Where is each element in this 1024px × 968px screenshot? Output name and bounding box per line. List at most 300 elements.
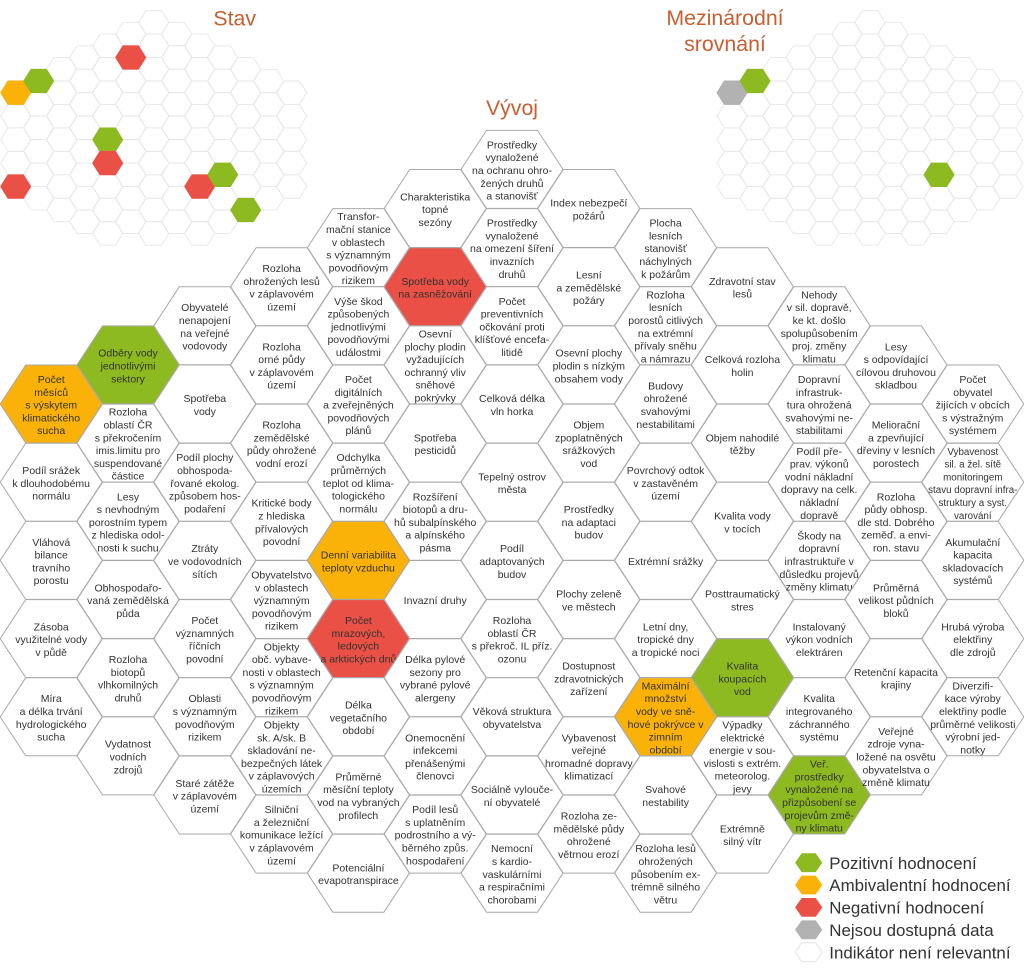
legend item: Negativní hodnocení: Negativní hodnocení bbox=[829, 898, 985, 918]
hex: Počet preventivních očkování: litidě bbox=[501, 347, 523, 359]
hex: Počet mrazových, ledových a arktických dnů: ledových bbox=[338, 641, 379, 653]
hex: Vláhová bilance travního porostu: travního bbox=[32, 562, 70, 574]
hex: Spotřeba vody na zasněžování bbox=[384, 248, 486, 326]
hex: Výše škod bbox=[307, 287, 409, 365]
hex: Odchylka průměrných teplot: normálu bbox=[339, 503, 378, 515]
hex: Transformační stanice: s významným bbox=[326, 250, 391, 262]
hex: Škody na dopravní infrastruktuře: Škody na bbox=[797, 529, 841, 542]
hex: Obyvatelé nenapojení na veřejné vodovody: Obyvatelé bbox=[181, 302, 229, 314]
hex: Objem zpoplatněných srážkových vod bbox=[538, 404, 640, 482]
hex: Rozloha ohrožených lesů v záplavovém území: v záplavovém bbox=[249, 289, 314, 301]
hex: Rozloha orné půdy v záplavovém území: Rozloha bbox=[262, 341, 301, 353]
hex: Výpadky elektrické energie: Výpadky bbox=[722, 720, 763, 732]
legend item: Pozitivní hodnocení: Pozitivní hodnocení bbox=[829, 854, 977, 873]
hex: Vláhová bilance travního porostu: Vláhová bbox=[32, 537, 70, 549]
hex: Lesy s nevhodným porostním typem bbox=[77, 482, 179, 560]
hex: Kritické body z hlediska přívalových povodní: přívalových bbox=[255, 523, 308, 535]
hex: Letní dny, tropické dny a tropické noci: a tropické noci bbox=[632, 647, 699, 659]
hex: Rozloha biotopů vlhkomilných druhů: druhů bbox=[115, 693, 142, 705]
hex: Rozloha zemědělské půdy ohrožené větrnou erozí: větrnou erozí bbox=[558, 849, 620, 861]
hex: Odběry vody jednotlivými sektory bbox=[77, 326, 179, 404]
hex: Počet digitálních plánů: digitálních bbox=[335, 387, 382, 399]
hex: Plocha lesních stanovišť náchylných k požárům: lesních bbox=[649, 230, 682, 242]
hex: Lesy s nevhodným porostním typem: s nevhodným bbox=[97, 504, 159, 516]
hex: Lesy s odpovídající cílovou druhovou skladbou: skladbou bbox=[875, 380, 917, 392]
hex: Rozloha oblastí ČR s překroč. IL příz. ozonu: oblastí ČR bbox=[487, 627, 537, 640]
hex: Průměrné měsíční teploty vod: profilech bbox=[339, 810, 378, 822]
hex: Zásoba využitelné vody v půdě: využitelné vody bbox=[15, 634, 88, 646]
hex: Rozloha zemědělské půdy ohrožené větrnou erozí: mědělské půdy bbox=[553, 823, 625, 835]
hex: Podíl plochy obhospodařované ekolog. způsobem: obhospoda- bbox=[177, 465, 233, 477]
hex: Letní dny, tropické dny a tropické noci: Letní dny, bbox=[643, 621, 688, 633]
hex: Charakteristika topné sezóny: sezóny bbox=[419, 217, 453, 229]
hex: Výpadky elektrické energie bbox=[691, 717, 793, 796]
hex: Prostředky na adaptaci budov: budov bbox=[574, 530, 604, 542]
hex: Tepelný ostrov města bbox=[461, 443, 563, 521]
hex: Budovy ohrožené svahovými nestabilitami: svahovými bbox=[641, 406, 690, 418]
hex: Oblasti s významným povodňovým rizikem: s významným bbox=[173, 706, 237, 718]
hex: Nemocní s kardiovaskulárními a respiračními chorobami: vaskulárními bbox=[483, 869, 541, 881]
hex: Veř. prostředky na přizpůsobení: projevům změ- bbox=[784, 810, 854, 822]
hex: Počet preventivních očkování: Počet bbox=[499, 296, 526, 308]
hex: Instalovaný výkon vodních elektráren: elektráren bbox=[796, 647, 843, 659]
hex: Nehody v sil. dopravě: klimatu bbox=[803, 353, 836, 365]
hex: Oblasti s významným povodňovým rizikem: rizikem bbox=[188, 732, 222, 744]
hex: Obyvatelé nenapojení na veřejné vodovody: na veřejné bbox=[180, 328, 229, 340]
hex: Míra a délka trvání hydrologického sucha: hydrologického bbox=[16, 719, 87, 731]
hex: Rozloha lesních porostů citlivých bbox=[615, 287, 717, 365]
hex: Instalovaný výkon vodních elektráren: výkon vodních bbox=[786, 634, 853, 646]
hex: Extrémně silný vítr: silný vítr bbox=[723, 836, 762, 848]
hex: Rozloha půdy obhosp. dle std. Dobrého: Rozloha bbox=[877, 491, 915, 503]
hex: Kvalita vody v tocích: v tocích bbox=[724, 523, 761, 535]
hex: Dopravní infrastruktura ohrožená svahovými nestabilitami: tura ohrožená bbox=[787, 400, 852, 412]
hex: Staré zátěže v záplavovém území: území bbox=[191, 803, 219, 815]
hex: Počet digitálních plánů: povodňových bbox=[327, 412, 389, 424]
hex: Rozloha orné půdy v záplavovém území: území bbox=[267, 380, 296, 392]
hex: Obyvatelstvo v oblastech významným povodňovým rizikem: povodňovým bbox=[252, 608, 312, 620]
legend bbox=[795, 853, 1011, 962]
hex: Nehody v sil. dopravě bbox=[768, 287, 870, 365]
hex: Vybavenost sil. a žel. sítě monitoringem: stavu dopravní infra- bbox=[928, 485, 1017, 496]
hex: Prostředky na omezení šíření invazních druhů: druhů bbox=[499, 269, 526, 281]
hex: Objekty sk. A/sk. B skladování nebezpečných látek: sk. A/sk. B bbox=[257, 732, 306, 744]
hex: Rozšíření biotopů a druhů: hů subalpínského bbox=[394, 517, 477, 529]
hex: Silniční a železniční komunikace: Silniční bbox=[265, 804, 299, 816]
hex: Extrémní srážky: Extrémní srážky bbox=[628, 556, 704, 568]
hex: Rozloha lesů ohrožených působením větru: ohrožených bbox=[638, 856, 693, 868]
hex: Objem zpoplatněných srážkových vod: zpoplatněných bbox=[555, 432, 623, 444]
hex: Průměrné měsíční teploty vod: měsíční teploty bbox=[323, 784, 394, 796]
hex: Osevní plochy plodin s nízkým obsahem vody bbox=[538, 326, 640, 404]
hex: Rozloha půdy obhosp. dle std. Dobrého: zeměď. a envi- bbox=[861, 530, 931, 542]
hex: Rozloha lesních porostů citlivých: přívaly sněhu bbox=[634, 341, 697, 353]
hex: Zásoba využitelné vody v půdě bbox=[0, 600, 102, 678]
hex: Rozloha biotopů vlhkomilných druhů: biotopů bbox=[111, 667, 145, 679]
hex: Silniční a železniční komunikace: a železniční bbox=[254, 817, 309, 829]
hex: Celková rozloha holin: holin bbox=[731, 367, 754, 379]
hex: Retenční kapacita krajiny: krajiny bbox=[881, 680, 912, 692]
hex: Dopravní infrastruktura ohrožená svahovými nestabilitami: infrastruk- bbox=[796, 387, 843, 399]
hex: Odchylka průměrných teplot: Odchylka bbox=[337, 452, 380, 464]
hex: Silniční a železniční komunikace: komunikace ležící bbox=[240, 830, 323, 842]
hex: Podíl srážek k dlouhodobému normálu: Podíl srážek bbox=[22, 465, 81, 477]
hex: srovnání green upper left bbox=[740, 69, 770, 93]
hex: Délka pylové sezony: Délka pylové bbox=[405, 654, 465, 666]
hex: Sociálně vyloučení obyvatelé: Sociálně vylouče- bbox=[471, 784, 554, 796]
hex: Stav red right bbox=[185, 175, 215, 198]
hex: Denní variabilita teploty vzduchu: Denní variabilita bbox=[321, 550, 396, 562]
hex: Potenciální evapotranspirace bbox=[307, 834, 409, 912]
hex: Svahové nestability: Svahové bbox=[645, 784, 686, 796]
hex: Podíl plochy obhospodařované ekolog. způsobem: podaření bbox=[184, 503, 226, 515]
hex: Spotřeba pesticidů: Spotřeba bbox=[414, 432, 457, 444]
hex: Akumulační kapacita skladovacích systémů: skladovacích bbox=[942, 562, 1003, 574]
hex: Podíl adaptovaných budov: adaptovaných bbox=[479, 556, 545, 568]
hex: Maximální množství vody ve sněhové pokrývce bbox=[615, 678, 717, 756]
hex: Stav green bottom right bbox=[231, 198, 261, 222]
hex: Ztráty ve vodovodních sítích: ve vodovodních bbox=[168, 556, 242, 568]
hex: Veř. prostředky na přizpůsobení: ny klimatu bbox=[796, 823, 843, 835]
hex: Stav red centre bbox=[93, 151, 123, 175]
hex: Plocha lesních stanovišť náchylných k požárům: náchylných bbox=[639, 256, 692, 268]
hex: Celková délka vln horka: vln horka bbox=[491, 406, 533, 418]
hex: Průměrné měsíční teploty vod bbox=[307, 756, 409, 834]
hex: Počet preventivních očkování: preventivních bbox=[481, 309, 543, 321]
hex: Vybavenost sil. a žel. sítě monitoringem: struktury a syst. bbox=[939, 498, 1007, 509]
hex: Extrémně silný vítr bbox=[691, 795, 793, 873]
hex: Rozloha zemědělské půdy ohrožené vodní erozí bbox=[231, 404, 333, 482]
hex: Rozloha ohrožených lesů v záplavovém území: ohrožených lesů bbox=[243, 276, 320, 288]
hex: Potenciální evapotranspirace: evapotranspirace bbox=[318, 875, 399, 887]
hex: Hrubá výroba elektřiny dle zdrojů: elektřiny bbox=[953, 634, 993, 646]
hex: Obyvatelstvo v oblastech významným povodňovým rizikem: Obyvatelstvo bbox=[251, 570, 312, 582]
hex: Meliorační a zpevňující dřeviny bbox=[845, 404, 947, 482]
hex: Posttraumatický stres: stres bbox=[731, 602, 754, 614]
hex: Budovy ohrožené svahovými nestabilitami: Budovy bbox=[648, 380, 684, 392]
hex: Veř. prostředky na přizpůsobení bbox=[768, 756, 870, 835]
hex: Vláhová bilance travního porostu bbox=[0, 521, 102, 599]
hex: Denní variabilita teploty vzduchu: teploty vzduchu bbox=[322, 562, 395, 574]
hex: Výše škod: událostmi bbox=[336, 347, 381, 359]
hex: Podíl lesů s uplatněním podrostního hospodaření: s uplatněním bbox=[405, 817, 466, 829]
hex: Diverzifikace výroby elektřiny: výrobní jed- bbox=[945, 732, 1001, 744]
hex: Staré zátěže v záplavovém území: Staré zátěže bbox=[175, 778, 234, 790]
hex: Denní variabilita teploty vzduchu bbox=[307, 521, 409, 599]
hex: Odběry vody jednotlivými sektory: jednotlivými bbox=[100, 360, 155, 372]
hex: Obyvatelé nenapojení na veřejné vodovody: vodovody bbox=[182, 341, 228, 353]
hex: Objem zpoplatněných srážkových vod: vod bbox=[580, 458, 597, 470]
hex: Rozloha půdy obhosp. dle std. Dobrého bbox=[845, 482, 947, 560]
hex: Vybavenost sil. a žel. sítě monitoringem: sil. a žel. sítě bbox=[944, 460, 1002, 471]
hex: Onemocnění infekcemi přenášenými členovci: Onemocnění bbox=[405, 732, 465, 744]
hex: Podíl přeprav. výkonů vodní nákladní dopravy bbox=[768, 443, 870, 522]
hex: Invazní druhy: Invazní druhy bbox=[404, 595, 467, 607]
hex: Prostředky na adaptaci budov bbox=[538, 482, 640, 560]
hex: Objekty obč. vybavenosti v oblastech: obč. vybave- bbox=[252, 654, 312, 666]
hex: Počet obyvatel žijících v obcích s výstražným systémem: Počet bbox=[959, 374, 986, 386]
hex: Vybavenost veřejné hromadné dopravy klimatizací: hromadné dopravy bbox=[545, 758, 633, 770]
hex: Nemocní s kardiovaskulárními a respiračními chorobami: chorobami bbox=[487, 894, 537, 906]
hex: Rozloha lesních porostů citlivých: porostů citlivých bbox=[628, 315, 703, 327]
hex: Rozloha lesů ohrožených působením větru: působením ex- bbox=[631, 869, 701, 881]
panel: Stav mini hexagon grid bbox=[1, 11, 307, 245]
hex: Počet měsíců s výskytem klimatického sucha: Počet bbox=[38, 374, 65, 386]
hex: Silniční a železniční komunikace bbox=[231, 795, 333, 873]
hex: Nehody v sil. dopravě: Nehody bbox=[801, 289, 838, 301]
heading: Mezinárodní srovnání: Mezinárodní bbox=[666, 6, 784, 30]
hex: srovnání grey bbox=[717, 81, 747, 104]
hex: Stav green centre bbox=[93, 128, 123, 151]
hex: Plochy zeleně ve městech bbox=[538, 560, 640, 638]
hex: Diverzifikace výroby elektřiny: průměrné velikosti bbox=[930, 719, 1015, 731]
hex: Podíl adaptovaných budov bbox=[461, 521, 563, 599]
hex: Rozloha ohrožených lesů v záplavovém území bbox=[231, 248, 333, 326]
hex: Povrchový odtok v zastavěném území: Povrchový odtok bbox=[627, 465, 705, 477]
hex: Rozloha lesů ohrožených působením větru: větru bbox=[654, 894, 677, 906]
hex: Hrubá výroba elektřiny dle zdrojů: Hrubá výroba bbox=[941, 621, 1004, 633]
hex: Svahové nestability: nestability bbox=[642, 797, 690, 809]
hex: Stav green right bbox=[208, 163, 238, 187]
hex: Kritické body z hlediska přívalových povodní: Kritické body bbox=[252, 498, 312, 510]
hex: Index nebezpečí požárů: Index nebezpečí bbox=[550, 198, 627, 210]
panel: Mezinárodní srovnání mini hexagon grid bbox=[717, 11, 1023, 245]
hex: Lesní a zemědělské požáry: Lesní bbox=[576, 270, 602, 282]
hex: Objekty obč. vybavenosti v oblastech: povodňovým bbox=[252, 693, 312, 705]
hex: Průměrná velikost půdních bloků: velikost půdních bbox=[858, 595, 934, 607]
hex: Posttraumatický stres: Posttraumatický bbox=[705, 589, 780, 601]
hex: Rozloha půdy obhosp. dle std. Dobrého: půdy obhosp. bbox=[864, 504, 928, 516]
hex: Lesy s odpovídající cílovou druhovou skladbou bbox=[845, 326, 947, 404]
hex: Prostředky na omezení šíření invazních druhů: invazních bbox=[490, 256, 534, 268]
hex: Obyvatelstvo v oblastech významným povodňovým rizikem bbox=[231, 560, 333, 638]
hex: Obyvatelé nenapojení na veřejné vodovody: nenapojení bbox=[179, 315, 231, 327]
hex: Osevní plochy plodin vyžadujících ochranný vliv: Osevní bbox=[419, 328, 452, 340]
hex: Délka pylové sezony bbox=[384, 639, 486, 717]
hex: Odběry vody jednotlivými sektory: sektory bbox=[111, 373, 146, 385]
hex: Staré zátěže v záplavovém území bbox=[154, 756, 256, 834]
hex: Dopravní infrastruktura ohrožená svahovými nestabilitami: Dopravní bbox=[798, 374, 841, 386]
hex: Lesní a zemědělské požáry bbox=[538, 248, 640, 326]
hex: Kvalita vody v tocích: Kvalita vody bbox=[714, 510, 771, 522]
hex: Obyvatelstvo v oblastech významným povodňovým rizikem: významným bbox=[254, 595, 310, 607]
hex: Sociálně vyloučení obyvatelé bbox=[461, 756, 563, 834]
hex: Dostupnost zdravotnických zařízení: Dostupnost bbox=[562, 661, 615, 673]
hex: Průměrná velikost půdních bloků: Průměrná bbox=[873, 582, 919, 594]
hex: Lesy s odpovídající cílovou druhovou skladbou: s odpovídající bbox=[864, 354, 928, 366]
hex: Rozloha půdy obhosp. dle std. Dobrého: dle std. Dobrého bbox=[857, 517, 935, 529]
hex: Povrchový odtok v zastavěném území: území bbox=[651, 491, 680, 503]
hex: Výše škod: povodňovými bbox=[327, 334, 389, 346]
hex: Podíl plochy obhospodařované ekolog. způsobem: řované ekolog. bbox=[170, 478, 239, 490]
hex: Plocha lesních stanovišť náchylných k požárům: stanovišť bbox=[644, 243, 688, 255]
hex: Délka vegetačního období: vegetačního bbox=[330, 712, 387, 724]
hex: Index nebezpečí požárů: požárů bbox=[573, 210, 605, 222]
hex: Akumulační kapacita skladovacích systémů: Akumulační bbox=[945, 537, 1000, 549]
hex: Plocha lesních stanovišť náchylných k požárům bbox=[615, 209, 717, 287]
hex: Objekty sk. A/sk. B skladování nebezpečných látek bbox=[231, 717, 333, 796]
hex: Podíl srážek k dlouhodobému normálu bbox=[0, 443, 102, 521]
hex: Délka pylové sezony: sezony pro bbox=[410, 667, 461, 679]
hex: Meliorační a zpevňující dřeviny: Meliorační bbox=[872, 420, 920, 432]
hex: Maximální množství vody ve sněhové pokrývce: množství bbox=[645, 693, 687, 705]
hex: Objekty obč. vybavenosti v oblastech: nosti v oblastech bbox=[242, 667, 321, 679]
hex: Index nebezpečí požárů bbox=[538, 170, 640, 248]
hex: Dostupnost zdravotnických zařízení: zařízení bbox=[570, 686, 608, 698]
hex: Obhospodařovaná zemědělská půda bbox=[77, 560, 179, 638]
hex: Lesy s nevhodným porostním typem: nosti k suchu bbox=[97, 542, 159, 554]
hex: Veř. prostředky na přizpůsobení: prostředky bbox=[795, 771, 844, 783]
hex: Rozšíření biotopů a druhů: biotopů a dru- bbox=[403, 504, 468, 516]
hex: Odběry vody jednotlivými sektory: Odběry vody bbox=[98, 348, 159, 360]
hex: Plochy zeleně ve městech: ve městech bbox=[562, 602, 616, 614]
hex: Vydatnost vodních zdrojů: Vydatnost bbox=[105, 739, 151, 751]
hex: Prostředky na omezení šíření invazních druhů: vynaložené bbox=[485, 230, 539, 242]
hex: Rozloha orné půdy v záplavovém území: v záplavovém bbox=[249, 367, 314, 379]
hex: Invazní druhy bbox=[384, 560, 486, 638]
hex: Charakteristika topné sezóny: Charakteristika bbox=[400, 191, 470, 203]
hex: Počet měsíců s výskytem klimatického sucha bbox=[0, 365, 102, 443]
hex: Diverzifikace výroby elektřiny: kace výroby bbox=[945, 693, 1002, 705]
hex: Průměrné měsíční teploty vod: vod na vybraných bbox=[317, 797, 400, 809]
hex: Dostupnost zdravotnických zařízení: zdravotnických bbox=[554, 673, 624, 685]
hex: Osevní plochy plodin vyžadujících ochranný vliv: vyžadujících bbox=[406, 354, 464, 366]
hex: Posttraumatický stres bbox=[691, 560, 793, 638]
hex: Průměrné měsíční teploty vod: Průměrné bbox=[335, 771, 382, 783]
hex: Maximální množství vody ve sněhové pokrývce: vody ve sně- bbox=[636, 706, 696, 718]
hex: Vydatnost vodních zdrojů bbox=[77, 717, 179, 795]
hex: Akumulační kapacita skladovacích systémů: systémů bbox=[953, 575, 993, 587]
hex: Objekty sk. A/sk. B skladování nebezpečných látek: skladování ne- bbox=[247, 745, 316, 757]
hex: Vybavenost sil. a žel. sítě monitoringem bbox=[922, 443, 1024, 522]
hex: Veřejné zdroje vynaložené na osvětu: obyvatelstva o bbox=[862, 764, 930, 776]
hex: Veř. prostředky na přizpůsobení: přizpůsobení se bbox=[782, 797, 856, 809]
hex: Rozloha zemědělské půdy ohrožené větrnou erozí: ohrožené bbox=[567, 836, 611, 848]
hex: Kvalita koupacích vod bbox=[691, 639, 793, 717]
hex: Počet významných říčních povodní: Počet bbox=[191, 615, 218, 627]
hex: Diverzifikace výroby elektřiny: Diverzifi- bbox=[952, 680, 994, 692]
hex: Prostředky na ochranu druhů a stanovišť: žených druhů bbox=[480, 178, 544, 190]
hex: Osevní plochy plodin s nízkým obsahem vody: plodin s nízkým bbox=[553, 360, 625, 372]
hex: Škody na dopravní infrastruktuře: infrastruktuře v bbox=[784, 556, 855, 568]
hex: Objekty sk. A/sk. B skladování nebezpečných látek: v záplavových bbox=[249, 771, 315, 783]
hex: Kvalita koupacích vod: koupacích bbox=[718, 673, 766, 685]
hex: Lesy s odpovídající cílovou druhovou skladbou: cílovou druhovou bbox=[856, 367, 936, 379]
hex: Prostředky na ochranu druhů a stanovišť: vynaložené bbox=[485, 152, 539, 164]
hex: Akumulační kapacita skladovacích systémů: kapacita bbox=[953, 550, 993, 562]
hex: Počet měsíců s výskytem klimatického sucha: klimatického bbox=[22, 412, 80, 424]
hex: Podíl přeprav. výkonů vodní nákladní dopravy: prav. výkonů bbox=[790, 459, 849, 471]
hex: Rozloha zemědělské půdy ohrožené větrnou erozí bbox=[538, 795, 640, 873]
hex: Objem zpoplatněných srážkových vod: Objem bbox=[573, 420, 605, 432]
hex: Rozšíření biotopů a druhů bbox=[384, 482, 486, 560]
hex: Objem nahodilé těžby: Objem nahodilé bbox=[706, 432, 779, 444]
hex: Rozloha biotopů vlhkomilných druhů bbox=[77, 639, 179, 717]
hex: Spotřeba vody: vody bbox=[194, 406, 217, 418]
hex: Veřejné zdroje vynaložené na osvětu: Veřejné bbox=[878, 726, 914, 738]
hex: Silniční a železniční komunikace: v záplavovém bbox=[249, 842, 314, 854]
heading: Vývoj: Vývoj bbox=[486, 96, 538, 120]
hex: Meliorační a zpevňující dřeviny: dřeviny v lesních bbox=[857, 445, 935, 457]
hex: Podíl adaptovaných budov: budov bbox=[498, 569, 527, 581]
hex: Kritické body z hlediska přívalových povodní: povodní bbox=[263, 536, 300, 548]
hex: Nehody v sil. dopravě: ke kt. došlo bbox=[793, 315, 846, 327]
hex: Vybavenost sil. a žel. sítě monitoringem: monitoringem bbox=[943, 472, 1002, 483]
hex: Dostupnost zdravotnických zařízení bbox=[538, 639, 640, 717]
hex: Onemocnění infekcemi přenášenými členovci: přenášenými bbox=[405, 758, 465, 770]
hex: Vydatnost vodních zdrojů: vodních bbox=[110, 752, 147, 764]
hex: Obhospodařovaná zemědělská půda: vaná zemědělská bbox=[87, 595, 169, 607]
hex: Počet obyvatel žijících v obcích s výstražným systémem: s výstražným bbox=[942, 412, 1004, 424]
hex: Míra a délka trvání hydrologického sucha: sucha bbox=[37, 732, 65, 744]
hex: Vláhová bilance travního porostu: porostu bbox=[34, 575, 69, 587]
hex: Osevní plochy plodin vyžadujících ochranný vliv: pokrývky bbox=[414, 392, 457, 404]
hex: Instalovaný výkon vodních elektráren: Instalovaný bbox=[793, 621, 847, 633]
hex: Rozloha zemědělské půdy ohrožené vodní erozí: Rozloha bbox=[262, 420, 301, 432]
hex: Letní dny, tropické dny a tropické noci: tropické dny bbox=[637, 634, 695, 646]
hex: Zdravotní stav lesů: Zdravotní stav bbox=[709, 276, 776, 288]
hex: Rozloha lesů ohrožených působením větru: trémně silného bbox=[631, 882, 700, 894]
hex: Kvalita koupacích vod: vod bbox=[734, 686, 751, 698]
hex: Lesy s nevhodným porostním typem: z hlediska odol- bbox=[92, 530, 165, 542]
hex: Vybavenost sil. a žel. sítě monitoringem: varování bbox=[954, 511, 992, 522]
hex: Diverzifikace výroby elektřiny: notky bbox=[960, 744, 986, 756]
hex: Vybavenost sil. a žel. sítě monitoringem: Vybavenost bbox=[947, 447, 998, 458]
hex: Dopravní infrastruktura ohrožená svahovými nestabilitami bbox=[768, 365, 870, 443]
hex: Objekty sk. A/sk. B skladování nebezpečných látek: bezpečných látek bbox=[241, 758, 323, 770]
hex: Rozloha oblastí ČR s překročením imis. limitu: částice bbox=[112, 471, 144, 483]
hex: Silniční a železniční komunikace: území bbox=[267, 855, 296, 867]
hex: Počet obyvatel žijících v obcích s výstražným systémem: žijících v obcích bbox=[936, 400, 1010, 412]
hex: Rozloha oblastí ČR s překročením imis. limitu: oblastí ČR bbox=[103, 419, 153, 432]
hex: Veřejné zdroje vynaložené na osvětu: zdroje vyna- bbox=[867, 739, 925, 751]
hex: Maximální množství vody ve sněhové pokrývce: zimním bbox=[649, 732, 683, 744]
hex: Kvalita vody v tocích bbox=[691, 482, 793, 560]
hex: Rozloha orné půdy v záplavovém území: orné půdy bbox=[258, 354, 306, 366]
hex: Veřejné zdroje vynaložené na osvětu bbox=[845, 717, 947, 795]
hex: Podíl srážek k dlouhodobému normálu: k dlouhodobému bbox=[12, 478, 90, 490]
hex: Celková délka vln horka bbox=[461, 365, 563, 443]
hex: Svahové nestability bbox=[615, 756, 717, 834]
hex: Staré zátěže v záplavovém území: v záplavovém bbox=[173, 791, 237, 803]
hex: Počet digitálních plánů: plánů bbox=[346, 425, 371, 437]
hex: Potenciální evapotranspirace: Potenciální bbox=[332, 862, 384, 874]
hex: Rozloha zemědělské půdy ohrožené větrnou erozí: Rozloha ze- bbox=[561, 810, 617, 822]
hex: Akumulační kapacita skladovacích systémů bbox=[922, 521, 1024, 599]
hex: Spotřeba pesticidů: pesticidů bbox=[414, 445, 456, 457]
hex: Lesní a zemědělské požáry: požáry bbox=[573, 295, 605, 307]
hex: Zásoba využitelné vody v půdě: v půdě bbox=[35, 647, 67, 659]
hex: Obyvatelé nenapojení na veřejné vodovody bbox=[154, 287, 256, 365]
hex: Maximální množství vody ve sněhové pokrývce: hové pokrývce v bbox=[628, 719, 704, 731]
hex: Počet významných říčních povodní: významných bbox=[176, 628, 234, 640]
hex: Vybavenost veřejné hromadné dopravy klimatizací: veřejné bbox=[572, 745, 606, 757]
hex: Tepelný ostrov města: Tepelný ostrov bbox=[478, 471, 547, 483]
heading: Mezinárodní srovnání: srovnání bbox=[684, 32, 766, 56]
hex: Podíl přeprav. výkonů vodní nákladní dopravy: dopravy na celk. bbox=[781, 484, 857, 496]
hex: Výpadky elektrické energie: jevy bbox=[732, 784, 752, 796]
hex: Podíl přeprav. výkonů vodní nákladní dopravy: nákladní bbox=[799, 497, 839, 509]
hex: Spotřeba vody na zasněžování: na zasněžování bbox=[398, 289, 472, 301]
hex: Dopravní infrastruktura ohrožená svahovými nestabilitami: stabilitami bbox=[796, 425, 843, 437]
hex: Rozloha biotopů vlhkomilných druhů: Rozloha bbox=[109, 654, 147, 666]
hex: Kritické body z hlediska přívalových povodní: z hlediska bbox=[258, 510, 305, 522]
hex: Osevní plochy plodin vyžadujících ochranný vliv: plochy plodin bbox=[405, 341, 466, 353]
legend item: Nejsou dostupná data: Nejsou dostupná data bbox=[829, 921, 994, 940]
hex: Odchylka průměrných teplot: průměrných bbox=[331, 465, 386, 477]
hex: Rozloha ohrožených lesů v záplavovém území: území bbox=[267, 302, 296, 314]
hex: Míra a délka trvání hydrologického sucha: a délka trvání bbox=[20, 706, 83, 718]
